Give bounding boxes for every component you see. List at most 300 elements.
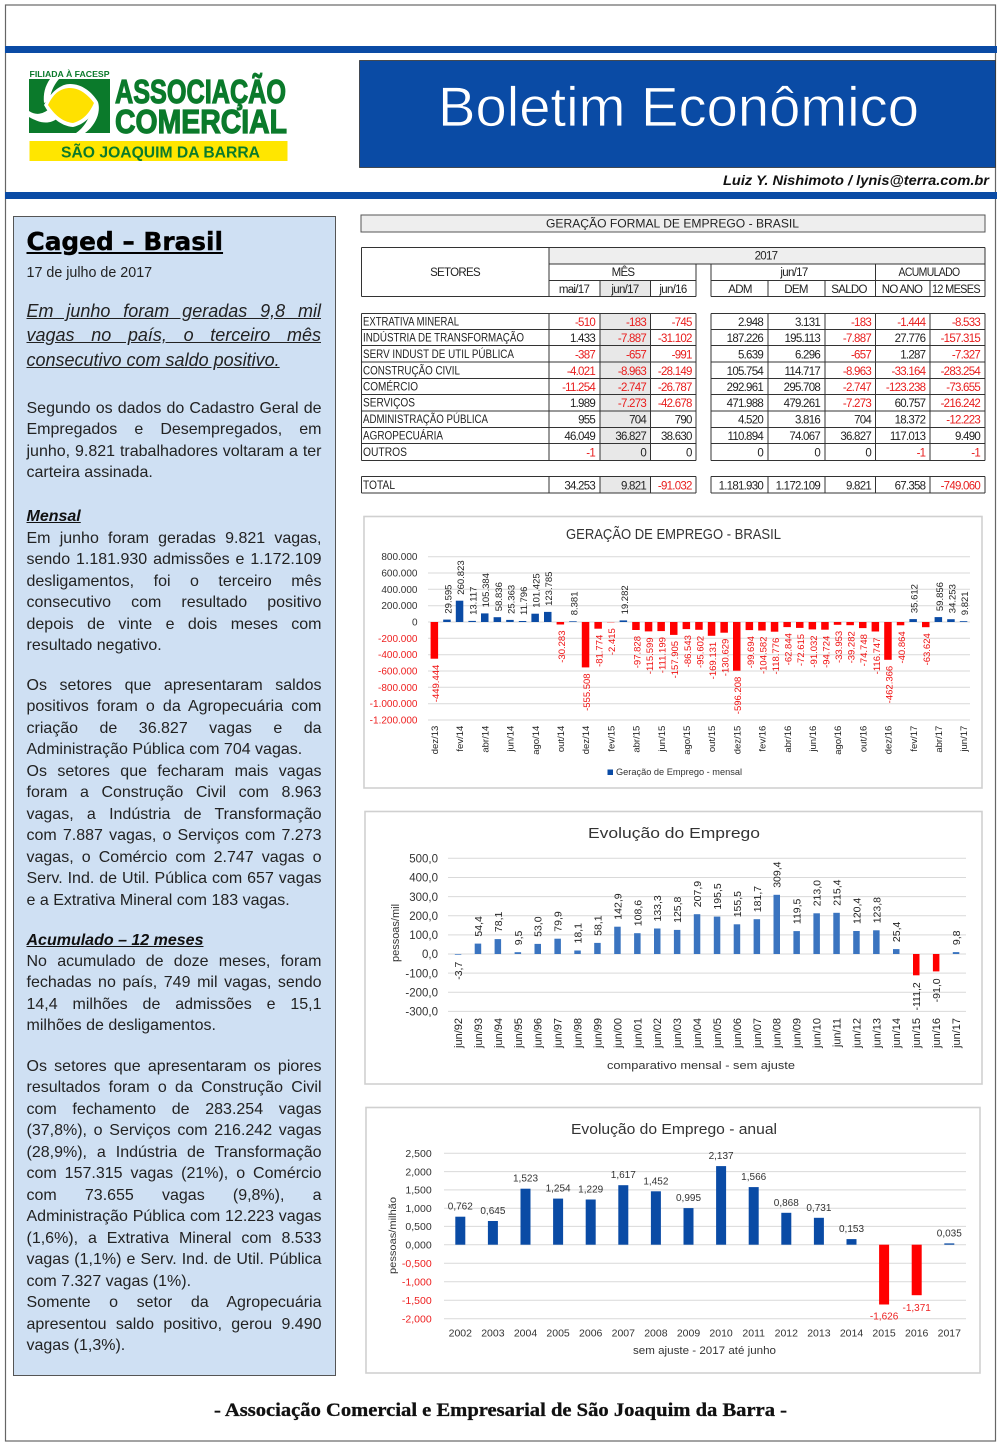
- x axis labels: 2006: [579, 1328, 603, 1340]
- data labels: -91.032: [809, 635, 820, 668]
- table rows: 0: [686, 448, 692, 460]
- table rows: -7.273: [843, 398, 871, 410]
- table rows: 9.821: [846, 480, 871, 492]
- text block: mensal: consecutivo com resultado positivo: [26, 594, 322, 611]
- x axis labels: jun/03: [672, 1018, 684, 1049]
- x axis labels: abr/17: [934, 726, 945, 753]
- table rows: -42.678: [658, 398, 692, 410]
- table rows: -4.021: [567, 366, 595, 378]
- table rows: -991: [672, 350, 692, 362]
- table rows: 187.226: [727, 333, 763, 345]
- table rows: 3.816: [795, 414, 820, 426]
- table rows: OUTROS: [363, 447, 407, 459]
- x axis labels: 2002: [449, 1328, 472, 1340]
- x axis labels: fev/15: [606, 726, 617, 752]
- x axis labels: dez/13: [430, 726, 441, 754]
- table rows: -7.273: [618, 398, 646, 410]
- data labels: 105.384: [481, 573, 492, 607]
- text block: mensal: sendo 1.181.930 admissões e 1.172.109: [26, 551, 322, 568]
- text block: piores resultados: com fechamento de 283.254 vagas: [26, 1101, 322, 1118]
- text block: piores resultados: (28,9%), a Indústria de Transformação: [26, 1144, 322, 1161]
- y axis labels: 300,0: [409, 892, 438, 904]
- data labels: -95.602: [695, 636, 706, 668]
- x axis labels: jun/08: [772, 1018, 784, 1049]
- lead text: Em junho foram geradas 9,8 mil: [26, 301, 321, 321]
- logo: Associação Comercial: SÃO JOAQUIM DA BARRA: [61, 142, 260, 162]
- x axis labels: 2015: [872, 1328, 896, 1340]
- table rows: 790: [675, 414, 692, 426]
- data labels: 25.363: [506, 585, 517, 614]
- data labels: -30.283: [557, 630, 568, 663]
- table header: ACUMULADO: [898, 267, 960, 279]
- data labels: -111.199: [658, 637, 669, 673]
- x axis labels: fev/17: [909, 726, 920, 752]
- data labels: -91,0: [931, 978, 943, 1002]
- y axis labels: 500,0: [409, 854, 438, 866]
- text block: setores: [26, 677, 322, 909]
- y axis labels: -1.000.000: [370, 699, 418, 710]
- table rows: 0: [865, 448, 871, 460]
- x axis labels: jun/00: [612, 1018, 624, 1049]
- data labels: -449.444: [431, 665, 442, 702]
- panel: chart Geração de Emprego - Brasil: [364, 516, 982, 788]
- text block: piores resultados: com 7.327 vagas (1%).: [26, 1273, 191, 1290]
- table rows: -1: [971, 448, 980, 460]
- y axis labels: 0,500: [405, 1221, 432, 1233]
- footer: - Associação Comercial e Empresarial de São Joaquim da Barra -: [214, 1401, 787, 1421]
- data labels: -33.953: [834, 631, 845, 663]
- data labels: [448, 1151, 962, 1322]
- table rows: -28.149: [658, 366, 692, 378]
- table rows: -657: [851, 350, 871, 362]
- x axis labels: 2013: [807, 1328, 831, 1340]
- table title bar: [361, 215, 985, 232]
- y axis labels: -1,500: [402, 1295, 432, 1307]
- table rows: -745: [672, 317, 692, 329]
- table header: 2017: [755, 250, 778, 262]
- table rows: 36.827: [615, 431, 646, 443]
- table rows: 34.253: [564, 480, 595, 492]
- y axis labels: -800.000: [378, 683, 418, 694]
- table rows: 105.754: [727, 366, 764, 378]
- y axis labels: -600.000: [378, 666, 418, 678]
- table rows: 60.757: [895, 398, 926, 410]
- data labels: 35.612: [910, 584, 921, 613]
- table rows: -216.242: [941, 398, 980, 410]
- y axis labels: 0,000: [405, 1239, 432, 1251]
- data labels: 108,6: [632, 900, 644, 926]
- banner: Boletim Econômico: Boletim Econômico: [438, 75, 919, 138]
- data labels: 260.823: [456, 560, 467, 595]
- data labels: -116.747: [872, 638, 883, 674]
- text block: intro: Empregados e Desempregados, em: [26, 421, 322, 438]
- subheading: Mensal: Mensal: [26, 508, 81, 524]
- x axis labels: [430, 726, 970, 755]
- legend: Geração de Emprego - mensal: [616, 767, 742, 777]
- x axis labels: jun/07: [752, 1018, 764, 1049]
- x axis labels: 2008: [644, 1328, 668, 1340]
- x axis labels: out/14: [556, 726, 567, 752]
- table rows: AGROPECUÁRIA: [363, 430, 443, 442]
- table rows: 295.708: [784, 382, 820, 394]
- data labels: 78,1: [493, 912, 505, 932]
- table header: ADM: [728, 284, 752, 296]
- x axis labels: ago/16: [833, 726, 844, 755]
- data labels: -130.629: [721, 639, 732, 676]
- x axis labels: ago/14: [531, 726, 542, 755]
- data labels: -3,7: [453, 962, 465, 980]
- data labels: -2.415: [607, 628, 618, 655]
- table rows: SERVIÇOS: [363, 398, 415, 410]
- data labels: -74.748: [859, 634, 870, 666]
- table header: jun/16: [658, 284, 687, 296]
- text block: setores: Os setores que fecharam mais vagas: [26, 763, 322, 780]
- table rows: 292.961: [727, 382, 763, 394]
- x axis labels: abr/14: [480, 726, 491, 753]
- table rows: 36.827: [840, 431, 871, 443]
- text block: mensal: resultado negativo.: [26, 637, 162, 654]
- logo: Associação Comercial: COMERCIAL: [115, 103, 287, 140]
- data labels: 0,731: [806, 1203, 832, 1214]
- text block: piores resultados: Administração Pública com 12.223 vagas: [26, 1208, 322, 1225]
- data labels: 1,566: [741, 1172, 767, 1183]
- table rows: 3.131: [795, 317, 820, 329]
- x axis labels: out/15: [707, 726, 718, 752]
- table rows: -283.254: [941, 366, 981, 378]
- text block: mensal: desligamentos, foi o terceiro mês: [26, 572, 322, 590]
- x axis labels: 2012: [775, 1328, 798, 1340]
- y axis title: pessoas/milhão: [387, 1197, 399, 1274]
- text block: setores: foram a Construção Civil com 8.963: [26, 784, 322, 801]
- table rows: 195.113: [785, 333, 820, 345]
- x axis labels: jun/04: [692, 1018, 704, 1049]
- table rows: 0: [757, 448, 763, 460]
- data labels: 0,995: [676, 1193, 701, 1204]
- table rows: 117.013: [890, 431, 926, 443]
- data labels: 133,3: [652, 895, 664, 922]
- table rows: 18.372: [895, 414, 926, 426]
- data labels: 18,1: [572, 923, 584, 944]
- x axis labels: jun/15: [911, 1018, 923, 1049]
- data labels: 119,5: [792, 898, 804, 924]
- data labels: -118.776: [771, 638, 782, 675]
- data labels: -1,371: [903, 1303, 931, 1314]
- y axis labels: 400.000: [381, 585, 418, 596]
- y axis labels: 1,000: [405, 1203, 432, 1215]
- data labels: 215,4: [832, 879, 844, 906]
- table rows: CONSTRUÇÃO CIVIL: [363, 364, 461, 378]
- x axis labels: 2003: [481, 1328, 505, 1340]
- x axis labels: abr/16: [783, 726, 794, 753]
- data labels: 1,229: [578, 1184, 604, 1196]
- table rows: 27.776: [895, 333, 926, 345]
- table header: jun/17: [610, 284, 639, 296]
- data labels: 1,523: [513, 1174, 538, 1185]
- data labels: -462.366: [884, 666, 895, 703]
- chart title: GERAÇÃO DE EMPREGO - BRASIL: [566, 526, 781, 543]
- table rows: 9.490: [955, 431, 980, 443]
- x axis labels: jun/02: [652, 1018, 664, 1049]
- data labels: 0,762: [448, 1202, 473, 1213]
- data labels: -1,626: [870, 1312, 899, 1322]
- table header: MÊS: [612, 266, 635, 279]
- table rows: 1.172.109: [776, 480, 820, 492]
- y axis labels: 2,000: [405, 1166, 432, 1178]
- text block: piores resultados: (1,6%), a Extrativa Mineral com 8.533: [26, 1230, 322, 1247]
- text block: acumulado: No acumulado de doze meses, foram: [26, 953, 322, 970]
- y axis labels: -2,000: [402, 1313, 432, 1325]
- x axis labels: 2011: [742, 1328, 765, 1340]
- x axis labels: jun/15: [657, 726, 668, 753]
- article heading: Caged – Brasil: [26, 227, 223, 256]
- data labels: 0,035: [937, 1228, 962, 1239]
- table rows: 0: [814, 448, 820, 460]
- data labels: 142,9: [612, 893, 624, 920]
- table rows: TOTAL: [363, 480, 396, 492]
- x axis labels: jun/13: [871, 1018, 883, 1049]
- data labels: -169.131: [708, 642, 719, 679]
- x axis labels: 2007: [612, 1328, 635, 1340]
- table rows: 4.520: [738, 414, 763, 426]
- table: setores: [362, 248, 985, 493]
- text block: piores resultados: apresentou saldo positivo, gerou 9.490: [26, 1316, 322, 1333]
- x axis labels: jun/98: [572, 1018, 584, 1049]
- table rows: -7.887: [843, 333, 871, 345]
- table rows: -183: [626, 317, 646, 329]
- text block: piores resultados: resultados foram o da Construção Civil: [26, 1079, 322, 1096]
- table rows: -1.444: [897, 317, 927, 329]
- data labels: 1,617: [611, 1170, 636, 1181]
- table rows: -2.747: [843, 382, 871, 394]
- data labels: 34.253: [947, 584, 958, 613]
- data labels: -99.694: [746, 636, 757, 668]
- x axis labels: dez/16: [884, 726, 895, 754]
- data labels: -111,2: [911, 982, 923, 1011]
- x axis labels: 2004: [514, 1328, 537, 1340]
- y axis labels: [405, 854, 438, 1019]
- text block: intro: Segundo os dados do Cadastro Geral de: [26, 400, 322, 417]
- table rows: 2.948: [738, 317, 763, 329]
- table rows: -2.747: [618, 382, 646, 394]
- text block: mensal: Em junho foram geradas 9.821 vagas,: [26, 530, 322, 546]
- data labels: -72.615: [796, 634, 807, 666]
- x axis labels: fev/14: [455, 726, 466, 752]
- y axis labels: [370, 552, 418, 726]
- table header: SALDO: [831, 284, 867, 296]
- data labels: 123,8: [871, 897, 883, 923]
- table rows: -7.327: [952, 350, 980, 362]
- table rows: -157.315: [941, 333, 980, 345]
- table rows: -8.533: [952, 317, 980, 329]
- bars: [455, 1166, 954, 1304]
- data labels: -596.208: [733, 677, 744, 714]
- y axis labels: 2,500: [405, 1148, 432, 1160]
- data labels: [453, 861, 963, 1011]
- y axis labels: 100,0: [409, 930, 438, 942]
- x axis labels: 2017: [938, 1328, 961, 1340]
- text block: piores resultados: [26, 1058, 322, 1354]
- data labels: -81.774: [595, 635, 606, 667]
- table rows: 74.067: [789, 431, 820, 443]
- x axis labels: [453, 1018, 963, 1049]
- text block: piores resultados: Somente o setor da Agropecuária: [26, 1294, 322, 1311]
- x axis labels: dez/14: [581, 726, 592, 754]
- data labels: 207,9: [692, 881, 704, 907]
- x axis labels: jun/14: [506, 726, 517, 753]
- x axis title: comparativo mensal - sem ajuste: [607, 1060, 795, 1072]
- data labels: 1,254: [546, 1184, 571, 1195]
- y axis labels: -1.200.000: [370, 716, 418, 726]
- text block: setores: e a Extrativa Mineral com 183 vagas.: [26, 892, 290, 909]
- table rows: -510: [575, 317, 595, 329]
- text block: acumulado: fechadas no país, 749 mil vagas, sendo: [26, 974, 322, 991]
- bars: [455, 895, 959, 975]
- y axis labels: -300,0: [405, 1007, 438, 1019]
- data labels: 11.796: [519, 587, 530, 615]
- table rows: -1: [586, 448, 595, 460]
- table rows: 479.261: [784, 398, 820, 410]
- table header: NO ANO: [882, 284, 923, 296]
- y axis labels: -100,0: [405, 968, 438, 980]
- data labels: 0,868: [774, 1198, 799, 1209]
- x axis labels: jun/05: [712, 1018, 724, 1049]
- data labels: -555.508: [582, 673, 593, 711]
- data labels: 155,5: [732, 891, 744, 917]
- x axis labels: abr/15: [632, 726, 643, 753]
- x axis labels: jun/99: [592, 1018, 604, 1049]
- y axis labels: 400,0: [409, 873, 438, 885]
- panel: chart Evolução do Emprego: [365, 812, 982, 1084]
- table rows: SERV INDUST DE UTIL PÚBLICA: [363, 348, 514, 361]
- text block: piores resultados: com 157.315 vagas (21%), o Comércio: [26, 1165, 322, 1182]
- data labels: 58,1: [592, 915, 604, 936]
- data labels: -97.828: [632, 636, 643, 668]
- x axis labels: jun/16: [808, 726, 819, 753]
- text block: setores: Os setores que apresentaram saldos: [26, 677, 322, 694]
- data labels: 53,0: [533, 916, 545, 937]
- panel: chart Evolução do Emprego - anual: [366, 1108, 980, 1373]
- chart title: Evolução do Emprego - anual: [571, 1121, 777, 1138]
- table rows: -91.032: [658, 480, 692, 492]
- data labels: 59.856: [935, 582, 946, 611]
- data labels: -63.624: [922, 633, 933, 665]
- x axis labels: jun/94: [493, 1018, 505, 1049]
- table rows: 0: [640, 448, 646, 460]
- data labels: 9,8: [951, 930, 963, 945]
- table rows: 1.287: [900, 350, 926, 362]
- data labels: 101.425: [532, 573, 543, 608]
- table rows: 38.630: [661, 431, 692, 443]
- text block: mensal: depois de vinte e dois meses com: [26, 616, 322, 632]
- text block: setores: vagas, o Comércio com 2.747 vagas o: [26, 849, 322, 866]
- x axis title: sem ajuste - 2017 até junho: [633, 1345, 776, 1357]
- x axis labels: [449, 1328, 961, 1340]
- logo: Associação Comercial: [29, 69, 288, 162]
- table rows: 110.894: [728, 431, 764, 443]
- table rows: -12.223: [946, 414, 980, 426]
- y axis labels: -1,000: [402, 1276, 432, 1288]
- data labels: 181,7: [752, 886, 764, 912]
- table rows: 1.989: [570, 398, 595, 410]
- text block: setores: Administração Pública com 704 vagas.: [26, 741, 302, 758]
- table title bar: GERAÇÃO FORMAL DE EMPREGO - BRASIL: [546, 216, 799, 230]
- logo: Associação Comercial: ASSOCIAÇÃO: [115, 73, 286, 110]
- table rows: -8.963: [618, 366, 646, 378]
- y axis labels: 0: [412, 618, 418, 628]
- text block: piores resultados: com 73.655 vagas (9,8%), a: [26, 1187, 322, 1204]
- banner: Boletim Econômico: [360, 60, 996, 168]
- data labels: 58.836: [494, 582, 505, 611]
- x axis labels: out/16: [858, 726, 869, 752]
- text block: setores: vagas, a Indústria de Transformação: [26, 806, 322, 823]
- x axis labels: jun/01: [632, 1018, 644, 1049]
- text block: piores resultados: vagas (1,3%).: [26, 1337, 125, 1354]
- y axis labels: 800.000: [381, 552, 418, 563]
- data labels: -115.599: [645, 637, 656, 674]
- text block: acumulado: 14,4 milhões de admissões e 15,1: [26, 996, 322, 1013]
- data labels: 25,4: [891, 922, 903, 942]
- x axis labels: jun/93: [473, 1018, 485, 1049]
- table rows: -749.060: [941, 480, 980, 492]
- text block: piores resultados: Os setores que apresentaram os piores: [26, 1058, 322, 1075]
- table rows: 114.717: [785, 366, 820, 378]
- y axis labels: [402, 1148, 432, 1325]
- panel: Caged article: [13, 216, 336, 1376]
- y axis labels: 200.000: [381, 601, 418, 612]
- lead text: [26, 301, 322, 370]
- table rows: INDÚSTRIA DE TRANSFORMAÇÃO: [363, 332, 524, 344]
- x axis labels: dez/15: [732, 726, 743, 754]
- data labels: 125,8: [672, 896, 684, 923]
- table header: mai/17: [559, 284, 589, 296]
- table rows: -183: [851, 317, 871, 329]
- x axis labels: jun/97: [553, 1018, 565, 1049]
- text block: setores: positivos foram o da Agropecuária com: [26, 698, 322, 715]
- data labels: 8.381: [569, 592, 580, 615]
- logo: Associação Comercial: FILIADA À FACESP: [30, 69, 110, 79]
- table rows: [363, 316, 981, 492]
- text block: mensal: [26, 530, 322, 654]
- table rows: -1: [917, 448, 926, 460]
- table rows: 955: [578, 414, 595, 426]
- table rows: -73.655: [946, 382, 980, 394]
- text block: intro: junho, 9.821 trabalhadores voltaram a ter: [26, 443, 322, 460]
- table rows: 5.639: [738, 350, 763, 362]
- table rows: -31.102: [658, 333, 692, 345]
- author credit: Luiz Y. Nishimoto / lynis@terra.com.br: [723, 172, 991, 188]
- y axis labels: -200.000: [378, 634, 418, 645]
- data labels: -39.282: [847, 631, 858, 663]
- x axis labels: 2014: [840, 1328, 863, 1340]
- table rows: 46.049: [564, 431, 595, 443]
- bars: [431, 601, 967, 671]
- data labels: 1,452: [643, 1176, 669, 1187]
- chart title: Evolução do Emprego: [588, 825, 760, 842]
- x axis labels: jun/09: [792, 1018, 804, 1049]
- x axis labels: jun/95: [513, 1018, 525, 1049]
- data labels: -94.724: [821, 636, 832, 668]
- table rows: -33.164: [892, 366, 927, 378]
- y axis title: pessoas/mil: [390, 904, 402, 962]
- text block: intro: carteira assinada.: [26, 464, 153, 481]
- table rows: 67.358: [895, 480, 926, 492]
- table rows: -7.887: [618, 333, 646, 345]
- x axis labels: jun/11: [832, 1018, 844, 1048]
- x axis labels: jun/06: [732, 1018, 744, 1049]
- text block: piores resultados: (37,8%), o Serviços com 216.242 vagas: [26, 1122, 322, 1139]
- x axis labels: jun/10: [812, 1018, 824, 1049]
- x axis labels: jun/16: [931, 1018, 943, 1049]
